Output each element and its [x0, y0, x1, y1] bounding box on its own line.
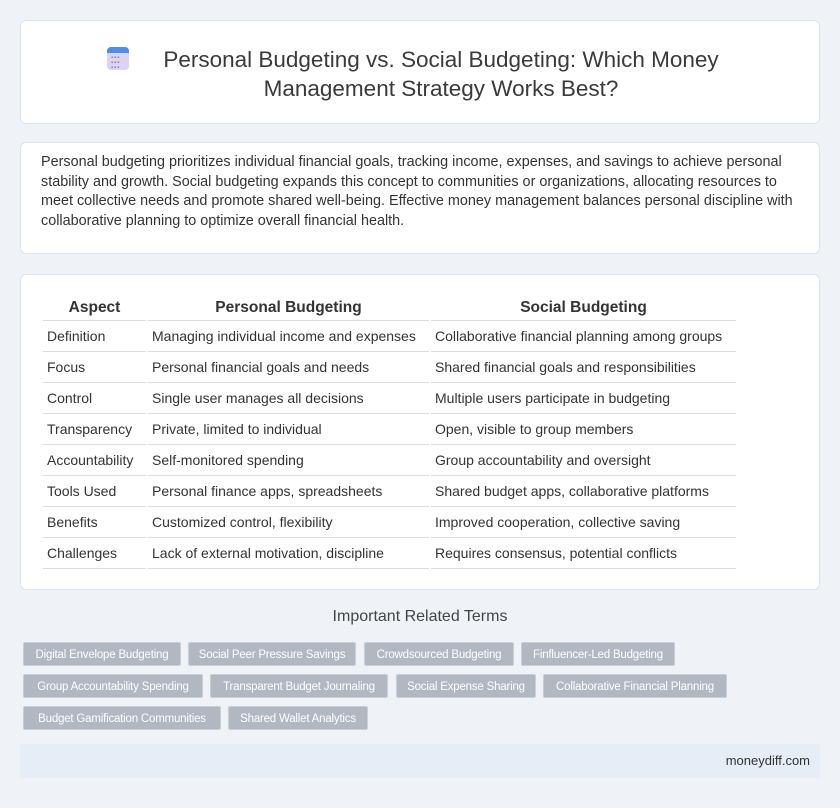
related term tags: Shared Wallet Analytics [240, 713, 356, 725]
comparison table: Single user manages all decisions [152, 390, 364, 406]
header card [20, 20, 820, 124]
related term tags: Finfluencer-Led Budgeting [533, 649, 663, 661]
title: Personal Budgeting vs. Social Budgeting: Which Money Management Strategy Works Best? [163, 47, 719, 101]
related term tags: Social Peer Pressure Savings [199, 649, 345, 661]
comparison table: Self-monitored spending [152, 452, 304, 468]
comparison table: Personal finance apps, spreadsheets [152, 483, 382, 499]
related term tags: Crowdsourced Budgeting [377, 649, 501, 661]
comparison table: Benefits [47, 514, 98, 530]
related terms heading: Important Related Terms [333, 608, 507, 625]
comparison table: Personal Budgeting [215, 299, 362, 316]
comparison table: Focus [47, 359, 85, 375]
comparison table: Lack of external motivation, discipline [152, 545, 384, 561]
comparison table: Shared budget apps, collaborative platforms [435, 483, 709, 499]
related term tags: Budget Gamification Communities [38, 713, 206, 725]
footer: moneydiff.com [726, 753, 810, 768]
icon: calendar: ▪▪▪ [111, 55, 120, 61]
comparison table: Multiple users participate in budgeting [435, 390, 670, 406]
intro text [20, 142, 820, 254]
comparison table: Shared financial goals and responsibilities [435, 359, 696, 375]
comparison table: Accountability [47, 452, 133, 468]
comparison table: Improved cooperation, collective saving [435, 514, 680, 530]
comparison table: Transparency [47, 421, 132, 437]
related term tags: Digital Envelope Budgeting [36, 649, 168, 661]
related term tags: Transparent Budget Journaling [223, 681, 375, 693]
related term tags: Collaborative Financial Planning [556, 681, 714, 693]
comparison table: Aspect [69, 299, 120, 316]
comparison table: Open, visible to group members [435, 421, 633, 437]
comparison table: Personal financial goals and needs [152, 359, 369, 375]
comparison table: Customized control, flexibility [152, 514, 333, 530]
comparison table: Group accountability and oversight [435, 452, 651, 468]
related term tags: Group Accountability Spending [37, 681, 189, 693]
intro text: Personal budgeting prioritizes individual financial goals, tracking income, expenses, and savings to achieve personal stability and growth. Social budgeting expands this concept to communities or organizations, allocating resources to meet collective needs and promote shared well-being. Effective money management balances personal discipline with collaborative planning to optimize overall financial health. [41, 154, 793, 228]
icon: calendar [107, 47, 129, 70]
comparison table: Private, limited to individual [152, 421, 322, 437]
icon: calendar: ▪▪▪ [111, 60, 120, 66]
footer [20, 744, 820, 778]
comparison table: Definition [47, 328, 105, 344]
related term tags: Social Expense Sharing [407, 681, 525, 693]
comparison table [20, 274, 820, 590]
comparison table: Challenges [47, 545, 117, 561]
comparison table: Social Budgeting [520, 299, 647, 316]
comparison table: Collaborative financial planning among groups [435, 328, 722, 344]
comparison table: Control [47, 390, 92, 406]
comparison table: Tools Used [47, 483, 116, 499]
comparison table: Requires consensus, potential conflicts [435, 545, 677, 561]
comparison table: Managing individual income and expenses [152, 328, 416, 344]
